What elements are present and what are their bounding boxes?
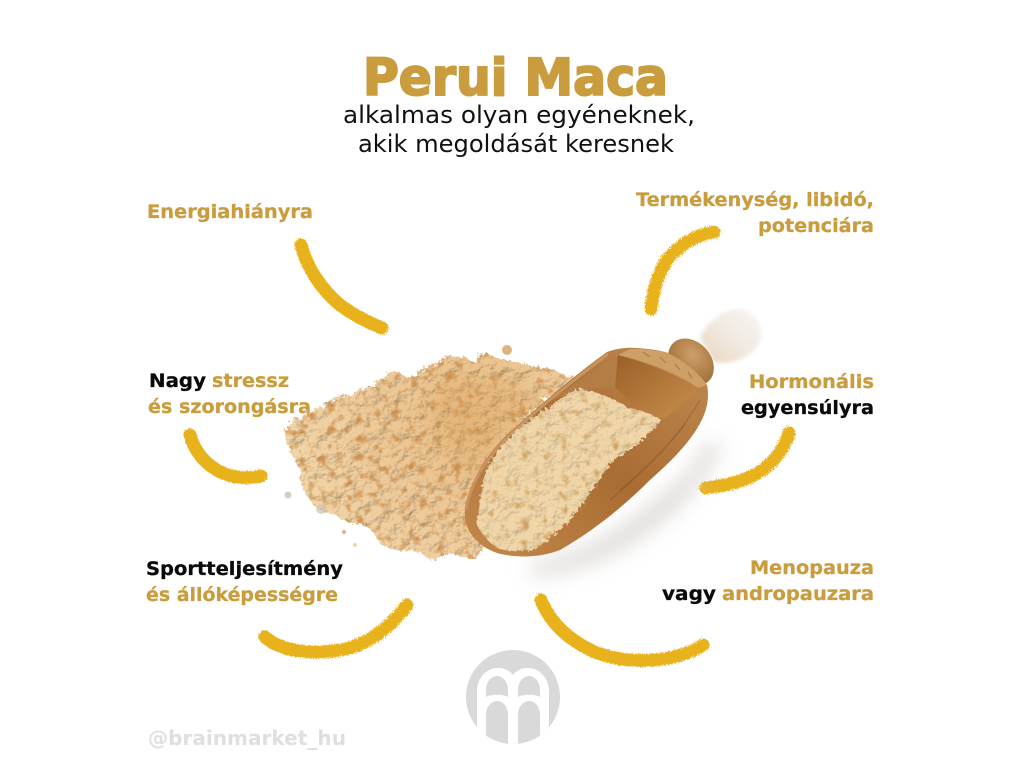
label: Hormonális egyensúlyra — [741, 371, 874, 419]
handle — [700, 309, 761, 363]
scoop inner wall — [615, 355, 698, 418]
subtitle: alkalmas olyan egyéneknek, — [343, 101, 695, 129]
label: Nagy stressz és szorongásra: stressz — [212, 370, 289, 392]
stroke: Termékenység — [651, 232, 714, 309]
title: Perui Maca — [363, 49, 668, 108]
scoop shadow — [530, 440, 722, 576]
subtitle: akik megoldását keresnek — [358, 130, 674, 158]
powder pile — [286, 356, 578, 557]
powder shade — [430, 376, 540, 480]
scoop knob — [659, 329, 723, 395]
brush strokes — [190, 232, 789, 660]
label: Hormonális egyensúlyra: Hormonális — [749, 371, 874, 393]
powder crumbs — [284, 345, 512, 547]
label: Termékenység, libidó, potenciára — [636, 189, 874, 237]
scoop wood grain — [610, 352, 700, 500]
label: Menopauza vagy andropauzara: vagy — [662, 583, 717, 605]
label: Sportteljesítmény és állóképességre: és állóképességre — [146, 584, 338, 606]
stroke: Sportteljesítmény — [265, 605, 407, 652]
scoop powder — [477, 389, 661, 551]
stroke: Energiahiányra — [301, 245, 382, 328]
logo — [466, 650, 560, 750]
label: Nagy stressz és szorongásra: Nagy — [149, 370, 207, 392]
stroke: Menopauza — [541, 600, 703, 660]
label: Sportteljesítmény és állóképességre — [146, 558, 344, 606]
scoop body — [465, 348, 708, 556]
label: Sportteljesítmény és állóképességre: Sportteljesítmény — [146, 558, 344, 580]
logo arches — [477, 668, 549, 750]
stroke: Hormonális — [706, 433, 789, 488]
label: Menopauza vagy andropauzara — [662, 557, 874, 605]
stroke: Nagy stressz — [190, 435, 261, 478]
label: Energiahiányra: Energiahiányra — [147, 201, 313, 223]
scoop left inner wall — [546, 355, 618, 404]
label: Menopauza vagy andropauzara: andropauzara — [722, 583, 874, 605]
scoop rim highlight — [466, 354, 608, 510]
illustration: maca powder and scoop — [284, 309, 761, 576]
label: Nagy stressz és szorongásra: és szorongásra — [148, 396, 311, 418]
subtitle — [343, 101, 695, 158]
label: Termékenység, libidó, potenciára: potenciára — [758, 215, 874, 237]
label: Menopauza vagy andropauzara: Menopauza — [750, 557, 874, 579]
label: Nagy stressz és szorongásra — [148, 370, 311, 418]
label: Hormonális egyensúlyra: egyensúlyra — [741, 397, 874, 419]
handle text: @brainmarket_hu — [148, 726, 346, 750]
scoop back rim — [618, 349, 707, 388]
label: Termékenység, libidó, potenciára: Termékenység, libidó, — [636, 189, 874, 211]
